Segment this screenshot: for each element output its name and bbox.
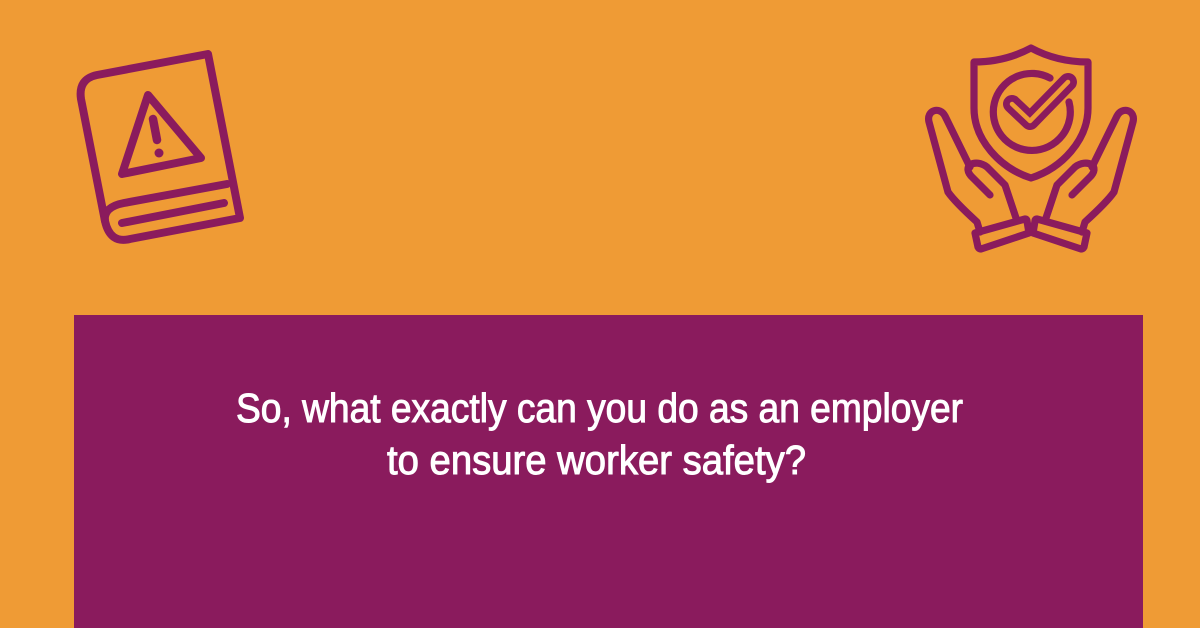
heading: question text [236, 385, 963, 483]
shield outline [974, 48, 1088, 178]
heading: question text: So, what exactly can you do as an employer [236, 385, 963, 431]
right hand [1082, 110, 1133, 232]
panel: question [74, 315, 1143, 628]
icon: safety manual book with warning triangle [81, 54, 240, 240]
left hand [929, 110, 980, 232]
heading: question text: to ensure worker safety? [387, 437, 806, 483]
check mark [1012, 82, 1068, 121]
icon: hands holding shield with check mark [929, 48, 1133, 249]
circle around check [993, 73, 1070, 150]
